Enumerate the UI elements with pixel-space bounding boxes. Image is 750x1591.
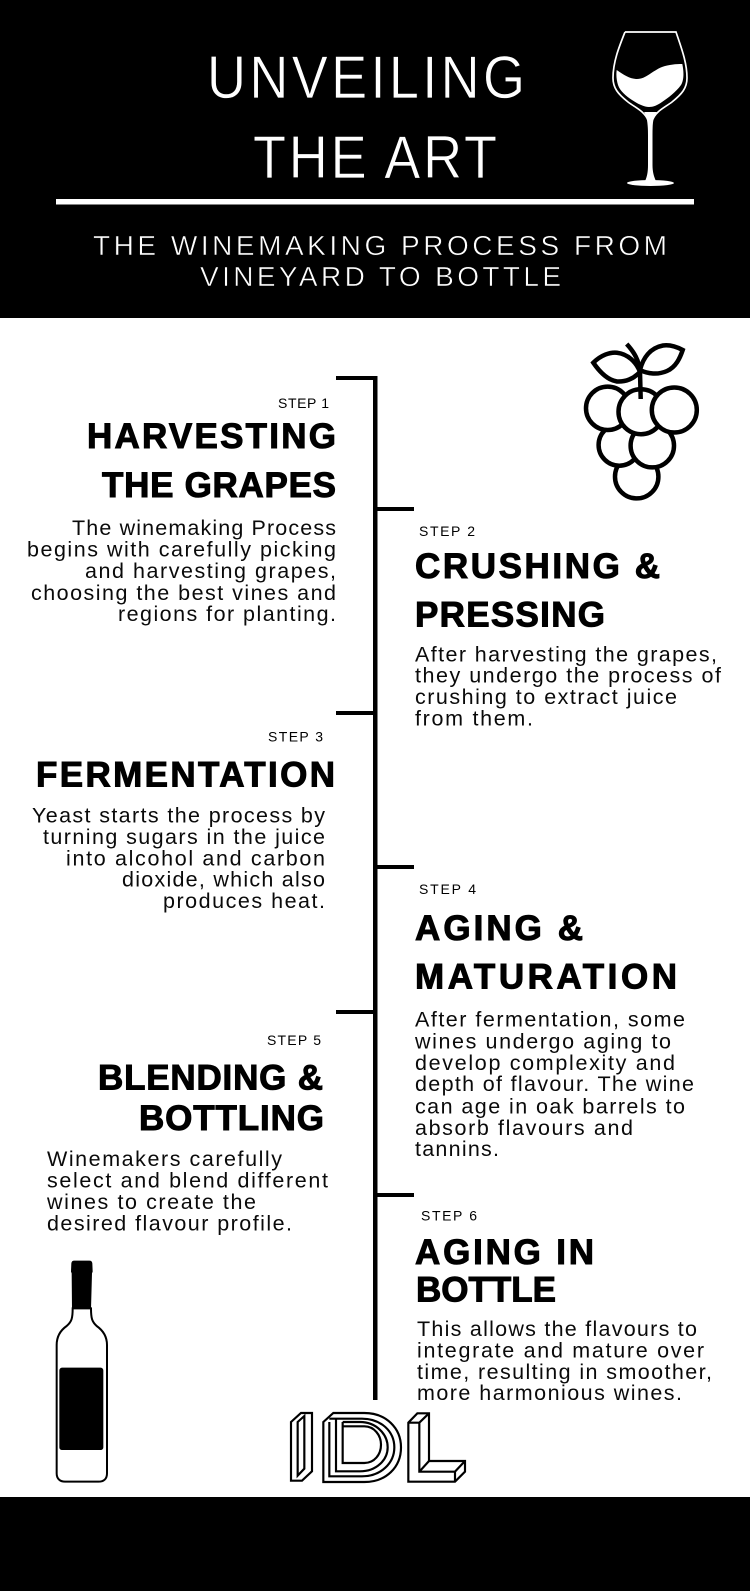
step 6 text: more harmonious wines.	[417, 1381, 682, 1405]
step 5 text: Winemakers carefully	[47, 1147, 282, 1171]
step 4 text	[414, 1008, 694, 1161]
step 2 text	[415, 643, 721, 731]
step 1 text: and harvesting grapes,	[85, 559, 336, 583]
step 4 text: tannins.	[415, 1137, 499, 1161]
title: THE ART	[253, 124, 497, 192]
step 3 label: STEP 3	[268, 729, 323, 745]
step 2 heading: CRUSHING &	[415, 547, 660, 586]
step 3 block	[32, 729, 335, 913]
step 6 block	[415, 1208, 712, 1405]
step 4 text: wines undergo aging to	[414, 1029, 671, 1053]
title: UNVEILING	[207, 44, 525, 112]
step 1 block	[27, 395, 336, 626]
step 3 heading: FERMENTATION	[36, 756, 335, 795]
step 1 heading: HARVESTING	[87, 417, 336, 456]
step 3 text	[32, 804, 325, 913]
step 5 heading	[98, 1058, 324, 1138]
step 1 text: regions for planting.	[118, 602, 336, 626]
step 1 text: The winemaking Process	[72, 516, 336, 540]
step 3 text: Yeast starts the process by	[32, 804, 325, 828]
step 1 text	[27, 516, 336, 626]
step 6 heading: BOTTLE	[416, 1271, 556, 1310]
step 2 text: crushing to extract juice	[415, 685, 677, 709]
step 4 text: develop complexity and	[415, 1051, 675, 1075]
step 5 heading: BOTTLING	[139, 1099, 324, 1138]
step 6 text: time, resulting in smoother,	[417, 1360, 712, 1384]
icon: grapes	[586, 344, 697, 498]
step 6 heading	[415, 1233, 594, 1310]
step 2 label: STEP 2	[419, 523, 475, 539]
step 4 block	[414, 881, 694, 1161]
step 6 heading: AGING IN	[415, 1233, 594, 1272]
step 4 heading: MATURATION	[415, 957, 677, 996]
step 3 text: into alcohol and carbon	[66, 847, 325, 871]
step 6 text: This allows the flavours to	[417, 1317, 697, 1341]
step 4 text: absorb flavours and	[415, 1116, 633, 1140]
step 2 heading: PRESSING	[415, 596, 605, 635]
step 1 label: STEP 1	[278, 395, 329, 411]
step 6 text: integrate and mature over	[417, 1339, 704, 1363]
step 6 text	[417, 1317, 712, 1405]
timeline	[336, 376, 414, 1400]
step 5 text	[46, 1147, 328, 1236]
subtitle	[93, 230, 667, 292]
footer band	[0, 1497, 750, 1591]
step 5 text: select and blend different	[47, 1169, 328, 1193]
step 2 block	[415, 523, 721, 731]
subtitle: THE WINEMAKING PROCESS FROM	[93, 230, 667, 261]
step 1 text: begins with carefully picking	[27, 538, 336, 562]
step 2 heading	[415, 547, 660, 635]
header panel	[0, 0, 750, 318]
step 5 text: desired flavour profile.	[47, 1212, 292, 1236]
icon: wine glass	[613, 32, 687, 186]
step 4 label: STEP 4	[419, 881, 476, 897]
step 4 text: After fermentation, some	[415, 1008, 685, 1032]
icon: wine bottle	[57, 1261, 107, 1482]
step 3 text: dioxide, which also	[122, 868, 325, 892]
step 3 text: turning sugars in the juice	[43, 825, 325, 849]
step 4 text: can age in oak barrels to	[415, 1094, 685, 1118]
logo: IDL	[291, 1413, 465, 1482]
divider rule	[56, 199, 694, 204]
step 4 text: depth of flavour. The wine	[415, 1072, 694, 1096]
step 6 label: STEP 6	[421, 1208, 477, 1224]
title	[207, 44, 525, 192]
step 5 text: wines to create the	[46, 1190, 256, 1214]
step 1 text: choosing the best vines and	[31, 581, 336, 605]
step 5 heading: BLENDING &	[98, 1058, 323, 1097]
step 2 text: After harvesting the grapes,	[415, 643, 717, 667]
step 4 heading: AGING &	[415, 909, 583, 948]
step 2 text: from them.	[415, 707, 533, 731]
step 4 heading	[415, 909, 677, 996]
step 1 heading	[87, 417, 336, 505]
step 5 block	[46, 1032, 328, 1236]
step 1 heading: THE GRAPES	[102, 466, 336, 505]
step 5 label: STEP 5	[267, 1032, 321, 1048]
step 2 text: they undergo the process of	[415, 664, 721, 688]
subtitle: VINEYARD TO BOTTLE	[200, 261, 561, 292]
step 3 text: produces heat.	[163, 889, 325, 913]
